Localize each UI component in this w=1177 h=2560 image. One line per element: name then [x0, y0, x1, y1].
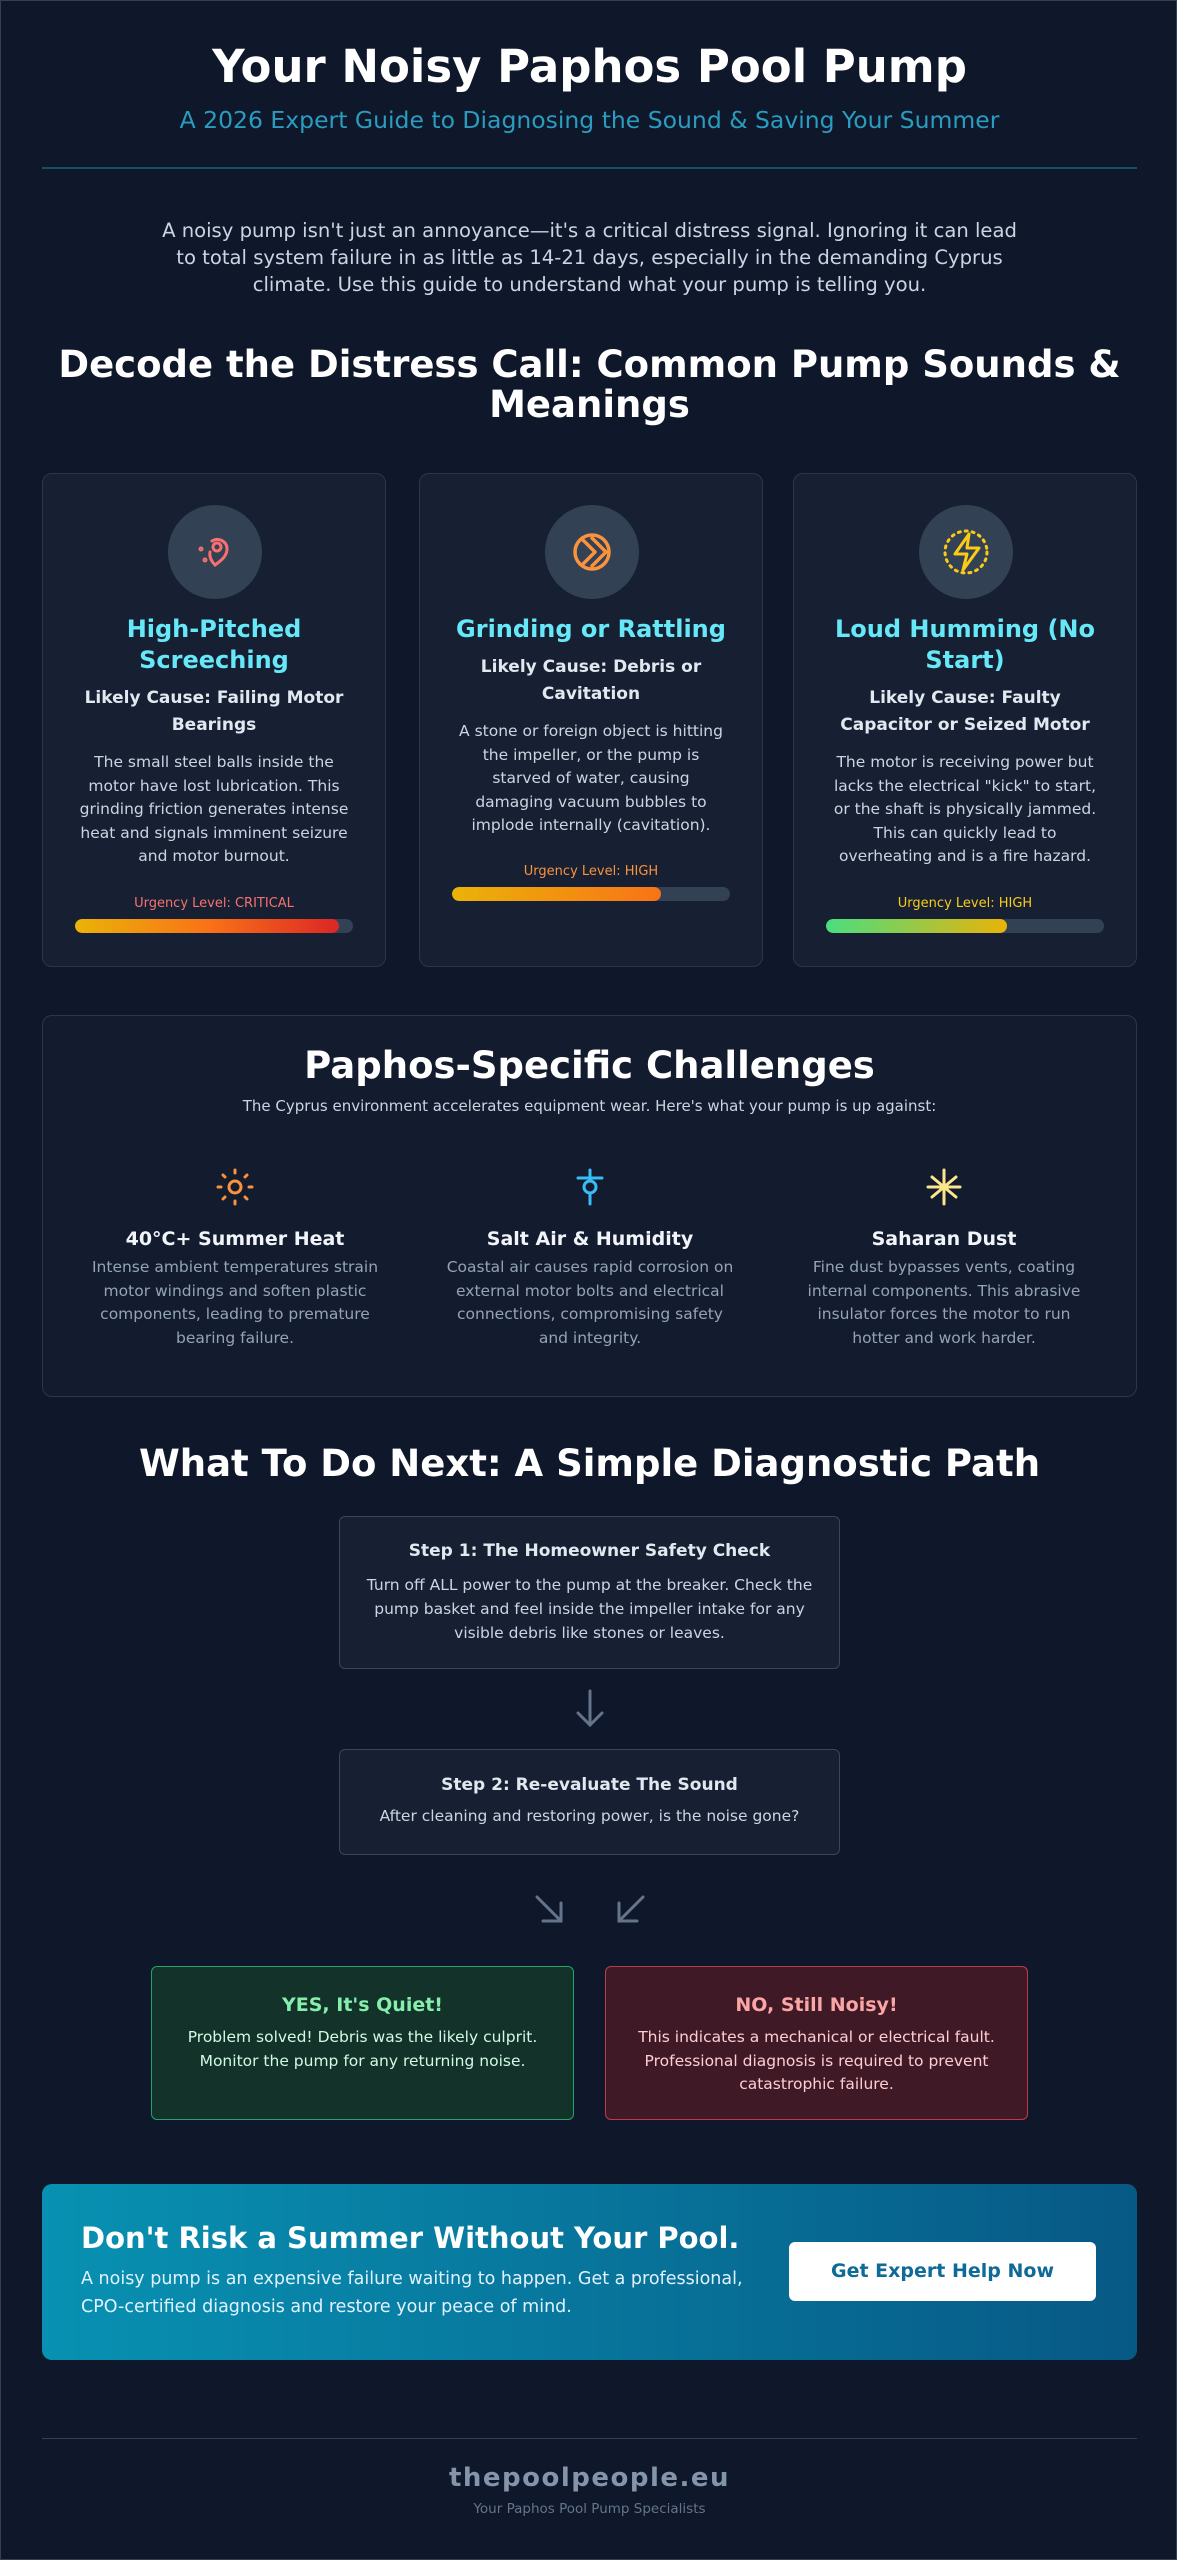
column: dust	[808, 1168, 1080, 1346]
title: Your Noisy Paphos Pool Pump	[212, 40, 967, 93]
icon: grinding	[545, 505, 639, 599]
card title: Grinding or Rattling	[456, 615, 726, 643]
column: salt	[447, 1168, 733, 1346]
column: heat: Intense ambient temperatures strain motor windings and soften plastic components, leading to premature bearing failure.	[92, 1258, 378, 1346]
column: dust: Fine dust bypasses vents, coating internal components. This abrasive insulator forces the motor to run hotter and work harder.	[808, 1258, 1080, 1346]
column: salt: Salt Air & Humidity	[487, 1228, 693, 1250]
outcome: yes: Problem solved! Debris was the likely culprit. Monitor the pump for any returning noise.	[188, 2028, 537, 2070]
description: The motor is receiving power but lacks the electrical "kick" to start, or the shaft is physically jammed. This can quickly lead to overheating and is a fire hazard.	[834, 753, 1096, 865]
icon: salt	[576, 1168, 604, 1206]
urgency: Urgency Level: HIGH	[524, 864, 658, 879]
panel: paphos challenges	[42, 1015, 1137, 1397]
step 1	[339, 1516, 840, 1669]
card title: High-Pitched Screeching	[127, 615, 301, 674]
icon: screech	[168, 505, 262, 599]
outcome: no: This indicates a mechanical or electrical fault. Professional diagnosis is required to prevent catastrophic failure.	[638, 2028, 995, 2093]
footer tagline: Your Paphos Pool Pump Specialists	[473, 2501, 706, 2517]
intro text: A noisy pump isn't just an annoyance—it's a critical distress signal. Ignoring it can lead to total system failure in as little as 14-21 days, especially in the demanding Cyprus climate. Use this guide to understand what your pump is telling you.	[162, 219, 1017, 296]
CTA heading: Don't Risk a Summer Without Your Pool.	[81, 2221, 739, 2255]
arrows: branch	[536, 1895, 644, 1922]
heading: what to do next: What To Do Next: A Simple Diagnostic Path	[139, 1442, 1040, 1485]
card title: Loud Humming (No Start)	[835, 615, 1095, 674]
CTA button: Get Expert Help Now	[831, 2260, 1054, 2282]
outcome: yes	[151, 1966, 574, 2120]
column: salt: Coastal air causes rapid corrosion on external motor bolts and electrical connections, compromising safety and integrity.	[447, 1258, 733, 1346]
step 2: Step 2: Re-evaluate The Sound	[441, 1775, 738, 1795]
subheading: The Cyprus environment accelerates equipment wear. Here's what your pump is up against:	[243, 1097, 936, 1115]
likely cause: Likely Cause: Failing Motor Bearings	[85, 688, 343, 735]
heading: decode: Decode the Distress Call: Common Pump Sounds & Meanings	[58, 343, 1121, 426]
column: heat: 40°C+ Summer Heat	[126, 1228, 344, 1250]
heading: Paphos-Specific Challenges	[304, 1044, 875, 1087]
outcome: no: NO, Still Noisy!	[735, 1994, 898, 2016]
outcome: no	[605, 1966, 1028, 2120]
description: A stone or foreign object is hitting the impeller, or the pump is starved of water, causing damaging vacuum bubbles to implode internally (cavitation).	[459, 722, 723, 834]
step 1: Turn off ALL power to the pump at the breaker. Check the pump basket and feel inside the impeller intake for any visible debris like stones or leaves.	[367, 1576, 812, 1642]
card: screeching	[42, 473, 386, 967]
column: heat	[92, 1168, 378, 1346]
step 2	[339, 1749, 840, 1855]
icon: dust	[926, 1168, 962, 1206]
urgency: Urgency Level: CRITICAL	[134, 896, 294, 911]
outcome: yes: YES, It's Quiet!	[282, 1994, 443, 2016]
card: grinding	[419, 473, 763, 967]
footer brand: thepoolpeople.eu	[449, 2463, 730, 2493]
description: The small steel balls inside the motor have lost lubrication. This grinding friction generates intense heat and signals imminent seizure and motor burnout.	[80, 753, 348, 865]
likely cause: Likely Cause: Debris or Cavitation	[481, 657, 701, 704]
CTA text: A noisy pump is an expensive failure waiting to happen. Get a professional, CPO-certified diagnosis and restore your peace of mind.	[81, 2269, 743, 2317]
CTA banner	[42, 2184, 1137, 2360]
CTA button	[789, 2242, 1096, 2301]
arrow: down	[576, 1690, 604, 1727]
step 2: After cleaning and restoring power, is the noise gone?	[380, 1807, 799, 1825]
subtitle: A 2026 Expert Guide to Diagnosing the Sound & Saving Your Summer	[180, 106, 999, 134]
icon: humming	[919, 505, 1013, 599]
step 1: Step 1: The Homeowner Safety Check	[409, 1541, 770, 1561]
urgency: Urgency Level: HIGH	[898, 896, 1032, 911]
icon: sun	[216, 1168, 254, 1206]
card: humming	[793, 473, 1137, 967]
likely cause: Likely Cause: Faulty Capacitor or Seized Motor	[840, 688, 1090, 735]
column: dust: Saharan Dust	[872, 1228, 1016, 1250]
